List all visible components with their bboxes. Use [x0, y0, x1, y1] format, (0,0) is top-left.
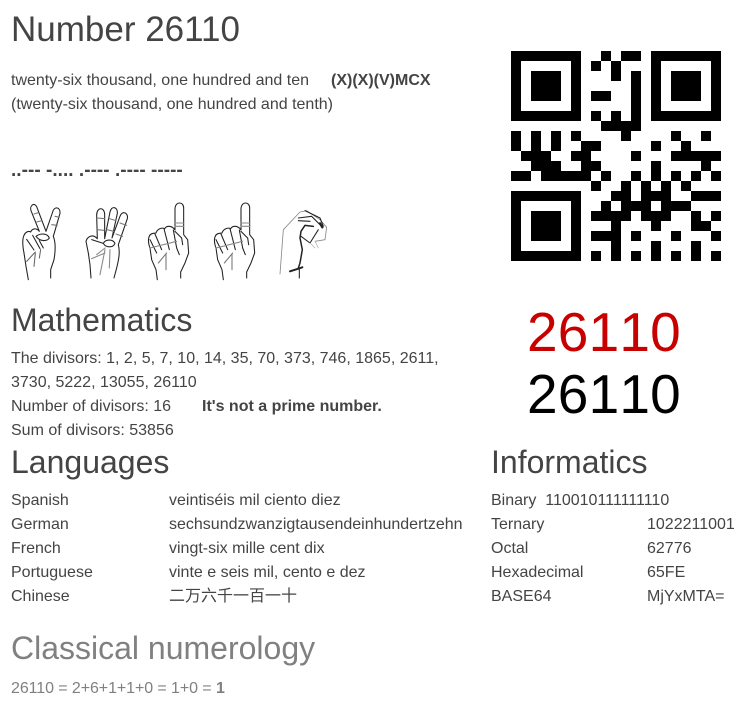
icon: hand sign 1 — [214, 203, 255, 280]
icon: hand sign 1 — [148, 203, 189, 280]
languages table: veintiséis mil ciento diez — [169, 492, 341, 509]
divisors list: The divisors: 1, 2, 5, 7, 10, 14, 35, 70, 373, 746, 1865, 2611, 3730, 5222, 13055, 26110 — [11, 350, 439, 391]
numerology calculation: 26110 = 2+6+1+1+0 = 1+0 = 1 — [11, 680, 225, 697]
black number: 26110 — [527, 363, 681, 425]
informatics table — [491, 492, 735, 605]
icon: hand sign 6 — [86, 208, 127, 278]
languages table: vingt-six mille cent dix — [169, 540, 325, 557]
languages table — [11, 492, 463, 605]
roman numeral: (X)(X)(V)MCX — [331, 72, 431, 89]
red number: 26110 — [527, 301, 681, 363]
languages table: Chinese — [11, 588, 70, 605]
languages table: French — [11, 540, 61, 557]
heading: informatics: Informatics — [491, 444, 647, 480]
languages table: Spanish — [11, 492, 69, 509]
languages table: 二万六千一百一十 — [169, 588, 297, 605]
prime note: It's not a prime number. — [202, 398, 382, 415]
informatics table: Ternary — [491, 516, 544, 533]
informatics table: Hexadecimal — [491, 564, 583, 581]
informatics table: 65FE — [647, 564, 685, 581]
informatics table: MjYxMTA= — [647, 588, 724, 605]
number of divisors: Number of divisors: 16 — [11, 398, 171, 415]
languages table: Portuguese — [11, 564, 93, 581]
ordinal name: (twenty-six thousand, one hundred and tenth) — [11, 96, 333, 113]
icon: hand sign 2 — [23, 204, 60, 280]
languages table: vinte e seis mil, cento e dez — [169, 564, 366, 581]
languages table: German — [11, 516, 69, 533]
title: Number 26110 — [11, 10, 240, 49]
informatics table: 1022211001 — [647, 516, 735, 533]
informatics table: BASE64 — [491, 588, 551, 605]
heading: languages: Languages — [11, 444, 169, 480]
heading: mathematics: Mathematics — [11, 302, 192, 338]
sum of divisors: Sum of divisors: 53856 — [11, 422, 174, 439]
icon: hand sign 0 — [280, 211, 327, 278]
languages table: sechsundzwanzigtausendeinhundertzehn — [169, 516, 463, 533]
number name in words: twenty-six thousand, one hundred and ten — [11, 72, 309, 89]
informatics table: Binary 110010111111110 — [491, 492, 669, 509]
morse code: ..--- -.... .---- .---- ----- — [11, 160, 183, 181]
informatics table: 62776 — [647, 540, 692, 557]
QR code — [511, 51, 721, 261]
heading: classical numerology: Classical numerology — [11, 630, 315, 666]
icon: sign language hands — [22, 202, 328, 280]
informatics table: Octal — [491, 540, 528, 557]
